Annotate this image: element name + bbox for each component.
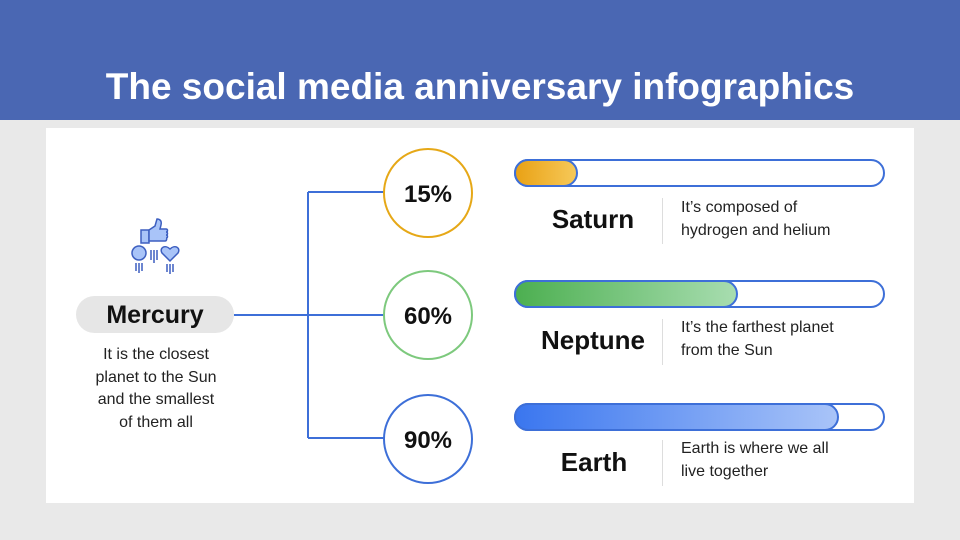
circle: 15%: 15% [404,181,452,208]
connector lines [234,192,384,438]
label: Neptune: Neptune [541,325,645,355]
bar: Neptune [515,281,884,307]
circle: 90%: 90% [404,427,452,454]
text: Saturn description: It’s composed of hydrogen and helium [681,199,830,239]
circle: 60% [384,271,472,359]
bar: Earth [515,404,884,430]
circle: 15% [384,149,472,237]
circle: 90% [384,395,472,483]
pill: Mercury [76,296,234,333]
title: The social media anniversary infographics [106,66,854,107]
circle: 60%: 60% [404,303,452,330]
label: Earth: Earth [561,447,627,477]
icon: social likes [132,219,179,274]
text: Mercury description: It is the closest planet to the Sun and the smallest of them all [96,346,216,430]
text: Earth description: Earth is where we all live together [681,440,829,480]
text: Neptune description: It’s the farthest planet from the Sun [681,319,834,359]
label: Saturn: Saturn [552,204,634,234]
header band [0,0,960,120]
pill: Mercury: Mercury [106,301,204,329]
bar: Saturn [515,160,884,186]
panel: main [46,128,914,503]
